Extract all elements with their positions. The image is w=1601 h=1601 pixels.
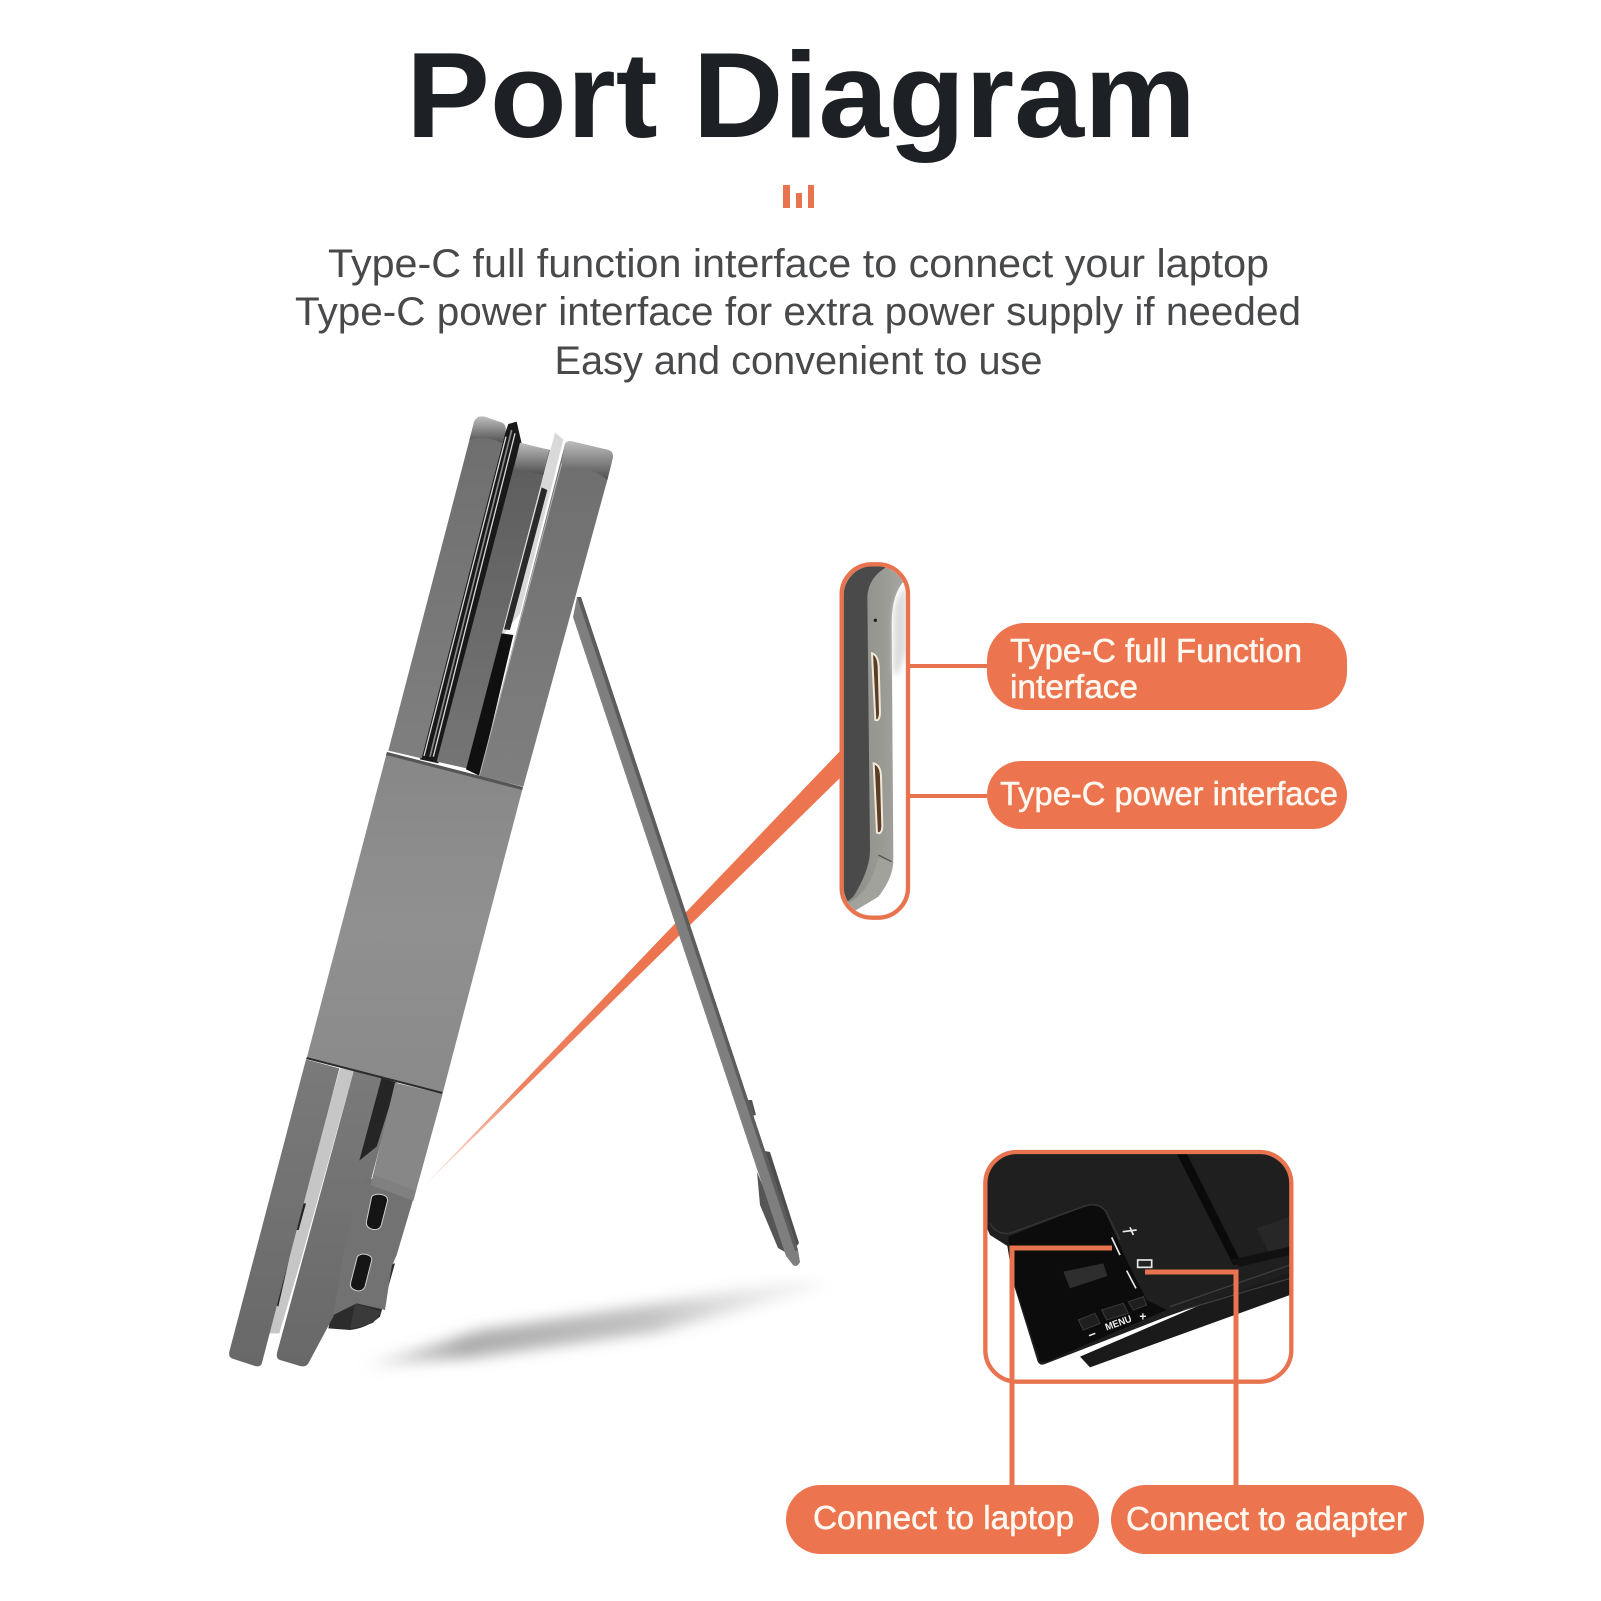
menu text: MENU xyxy=(1104,1314,1133,1333)
label: Type-C power interface: Type-C power interface xyxy=(1000,775,1338,812)
usb glyph xyxy=(1123,1227,1137,1235)
label: Type-C full Function interface: Type-C full Function xyxy=(1010,632,1302,669)
dark back xyxy=(843,566,888,905)
metal edge xyxy=(843,566,905,913)
mic dot xyxy=(874,619,877,622)
device: central block xyxy=(307,752,523,1092)
right plate cap xyxy=(560,441,613,480)
panel: rear port close-up: + xyxy=(1139,1310,1146,1324)
port 1 xyxy=(366,1194,388,1230)
subtitle text block: Easy and convenient to use xyxy=(554,339,1042,383)
lower tray xyxy=(1080,1267,1290,1367)
dark back section xyxy=(328,1263,395,1330)
panel: rear port close-up: − xyxy=(1086,1326,1099,1343)
subtitle text block xyxy=(295,242,1301,383)
icon: orange bars xyxy=(783,185,814,208)
raised pad right xyxy=(1257,1217,1290,1255)
dark slot right xyxy=(466,633,513,776)
kickstand xyxy=(573,597,800,1266)
silver sliver xyxy=(502,433,563,637)
device: lower plates and ports xyxy=(229,1059,443,1366)
dark slot left xyxy=(420,422,522,763)
connector line: power xyxy=(909,794,989,798)
device body xyxy=(983,1150,1293,1365)
dark slot xyxy=(359,1077,397,1161)
small block xyxy=(371,1083,443,1201)
port upper xyxy=(872,653,880,720)
left plate cap xyxy=(469,417,506,443)
title: Port Diagram xyxy=(406,27,1196,163)
rear recess xyxy=(1008,1205,1167,1362)
label: Type-C power interface xyxy=(987,761,1347,829)
silver gap xyxy=(268,1068,354,1333)
subtitle text block: Type-C power interface for extra power supply if needed xyxy=(295,290,1301,334)
recess lip xyxy=(990,1205,1120,1240)
label: Type-C full Function interface xyxy=(987,623,1347,710)
middle plate xyxy=(437,443,550,768)
ground shadow xyxy=(365,1280,835,1366)
subtitle text block: Type-C full function interface to connect your laptop xyxy=(328,242,1269,286)
tray seam lines xyxy=(1170,1265,1290,1310)
connector line: adapter xyxy=(1145,1272,1236,1487)
label: Connect to laptop: Connect to laptop xyxy=(813,1499,1074,1536)
connector line: full function xyxy=(909,664,989,668)
buttons xyxy=(1078,1313,1100,1330)
middle plate cap xyxy=(514,443,549,475)
port 2 xyxy=(350,1254,372,1291)
bottom corner xyxy=(848,858,894,910)
panel: rear port close-up xyxy=(983,1150,1293,1383)
left plate xyxy=(388,417,506,758)
left lower plate xyxy=(229,1059,339,1366)
port housing xyxy=(333,1177,415,1315)
display window xyxy=(1063,1263,1107,1288)
panel: side port close-up xyxy=(842,563,910,920)
arrow: orange callout ray xyxy=(424,749,842,1186)
power glyph xyxy=(1138,1260,1152,1267)
label: Connect to adapter: Connect to adapter xyxy=(1126,1500,1407,1537)
panel seam xyxy=(1177,1153,1242,1265)
right plate xyxy=(479,441,613,787)
label: Connect to adapter xyxy=(1111,1485,1424,1554)
label: Connect to laptop xyxy=(786,1485,1099,1554)
port slots xyxy=(1112,1237,1136,1288)
middle lower plate xyxy=(277,1070,397,1366)
connector line: laptop xyxy=(1012,1248,1112,1487)
port lower xyxy=(874,763,882,833)
top highlight xyxy=(893,587,906,677)
label: Type-C full Function interface: interface xyxy=(1010,668,1138,705)
slot highlights xyxy=(424,433,515,757)
device: upper plates xyxy=(388,417,613,787)
